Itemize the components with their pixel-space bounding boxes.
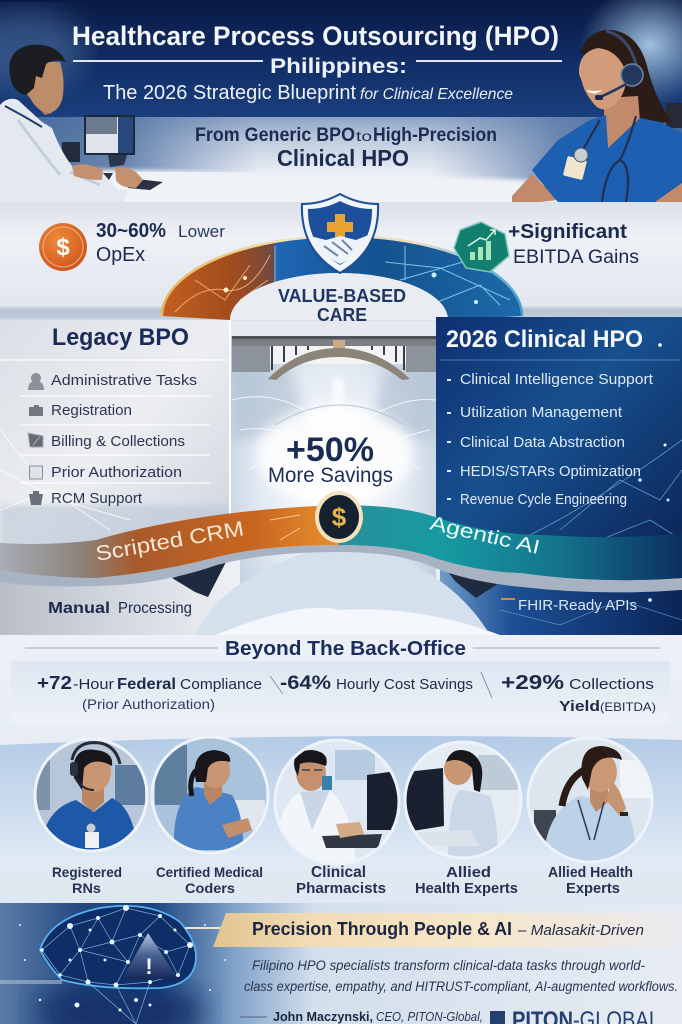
- value-based care label: CARE: [317, 305, 367, 325]
- stat: prior authorization: (Prior Authorization): [82, 696, 215, 712]
- name: Pharmacists: [296, 880, 386, 897]
- savings callout: More Savings: [268, 464, 393, 487]
- bottom section background: [0, 903, 682, 1024]
- stat: prior authorization: Compliance: [180, 676, 262, 693]
- name: RNs: [72, 880, 101, 896]
- doctor figure: [0, 45, 163, 202]
- stat: collections yield: (EBITDA): [600, 700, 656, 714]
- ribbon shadows: [172, 562, 507, 598]
- ribbon: scripted crm: [0, 505, 339, 578]
- portrait: [34, 740, 148, 852]
- icon: billing document: [28, 433, 43, 447]
- attribution: CEO, PITON-Global,: [376, 1009, 483, 1024]
- ribbon: scripted crm: Scripted CRM: [94, 517, 246, 566]
- value-based care label: VALUE-BASED: [278, 286, 406, 306]
- team member: clinical pharmacists: [272, 739, 404, 897]
- title: The 2026 Strategic Blueprint: [103, 82, 356, 104]
- stat: lower opex: OpEx: [96, 244, 145, 266]
- panel: clinical hpo: [436, 317, 682, 560]
- stat: hourly cost savings: [280, 673, 473, 694]
- stat: prior authorization: Federal: [117, 676, 176, 693]
- icon: dollar coin connector: [315, 491, 363, 543]
- team member: allied health experts: [404, 740, 524, 897]
- lower right panel: [440, 540, 682, 635]
- stat: prior authorization: -Hour: [73, 676, 114, 693]
- subheading: to: [356, 128, 372, 144]
- heading: 2026 clinical hpo: 2026 Clinical HPO: [446, 326, 643, 353]
- heading: legacy bpo: Legacy BPO: [52, 324, 189, 351]
- name: Clinical: [311, 864, 366, 881]
- icon: alert triangle: [122, 933, 178, 979]
- label: manual processing: Manual: [48, 600, 110, 617]
- stat: hourly cost savings: Hourly Cost Savings: [336, 676, 473, 693]
- stat: prior authorization: [37, 673, 262, 712]
- team member: certified medical coders: [150, 735, 270, 896]
- item: administrative tasks: Administrative Tasks: [51, 372, 197, 389]
- team member: allied health experts 2: [525, 737, 657, 897]
- savings callout: +50%: [286, 431, 374, 469]
- value-based care label: [278, 286, 406, 325]
- lower background: [0, 635, 682, 905]
- stat: ebitda gains: EBITDA Gains: [513, 247, 639, 268]
- lower left panel: [0, 560, 240, 635]
- icon: person: [28, 373, 44, 390]
- banner: precision through people and ai: Precision Through People & AI: [252, 919, 512, 939]
- panel: legacy bpo: [0, 320, 230, 560]
- stat: lower opex: [39, 220, 225, 271]
- title: [72, 21, 562, 104]
- name: [52, 864, 122, 896]
- name: Experts: [566, 880, 620, 897]
- item: clinical data abstraction: Clinical Data Abstraction: [460, 434, 625, 451]
- name: Allied Health: [548, 864, 633, 881]
- icon: alert triangle: !: [145, 954, 153, 979]
- stat: hourly cost savings: -64%: [280, 673, 331, 694]
- stat: collections yield: +29%: [501, 672, 564, 694]
- portrait: [404, 740, 524, 860]
- ribbon silver edge: [0, 545, 682, 592]
- attribution: John Maczynski,: [273, 1009, 373, 1024]
- icon: dollar coin: [39, 223, 87, 271]
- body text: Filipino HPO specialists transform clinical-data tasks through world-: [252, 957, 645, 973]
- name: Health Experts: [415, 880, 518, 897]
- subheading: Clinical HPO: [277, 145, 409, 171]
- stat: lower opex: Lower: [178, 222, 225, 241]
- snowy bridge base: [196, 551, 500, 635]
- name: Registered: [52, 864, 122, 880]
- item: billing and collections: Billing & Collections: [51, 433, 185, 450]
- heading: beyond the back-office: Beyond The Back-Office: [225, 638, 466, 660]
- icon: shield with handshake: [302, 194, 378, 273]
- bridge: [232, 336, 436, 380]
- name: [548, 864, 633, 897]
- stat: ebitda gains: [454, 221, 639, 272]
- icon: clipboard: [29, 491, 43, 505]
- name: Certified Medical: [156, 864, 263, 880]
- ribbon: agentic ai: Agentic AI: [428, 512, 542, 559]
- name: [415, 864, 518, 897]
- icon: ai brain network: [0, 905, 226, 1024]
- label: manual processing: Processing: [118, 600, 192, 617]
- benefits band: [0, 202, 682, 322]
- panel: compliance stats: [11, 661, 670, 723]
- header panel: [0, 0, 682, 210]
- subheading: High-Precision: [373, 125, 497, 146]
- value-based care arch: [162, 236, 522, 325]
- name: [156, 864, 263, 896]
- name: [296, 864, 386, 897]
- item: revenue cycle engineering: Revenue Cycle Engineering: [460, 491, 627, 508]
- subheading: From Generic BPO: [195, 125, 355, 146]
- item: rcm support: RCM Support: [51, 490, 143, 507]
- ribbon: agentic ai: [339, 505, 682, 580]
- item: clinical intelligence support: Clinical Intelligence Support: [460, 371, 654, 388]
- center column: bridge and savings: [231, 336, 436, 584]
- stat: prior authorization: +72: [37, 673, 72, 693]
- item: hedis stars optimization: HEDIS/STARs Optimization: [460, 463, 641, 480]
- team member: registered rns: [30, 735, 150, 896]
- item: prior authorization: Prior Authorization: [51, 464, 182, 481]
- stat: lower opex: 30~60%: [96, 220, 166, 242]
- banner: precision through people and ai: [185, 913, 682, 947]
- savings callout: [268, 431, 393, 487]
- item: utilization management: Utilization Management: [460, 404, 623, 421]
- team photo band: [0, 736, 682, 865]
- banner: precision through people and ai: – Malasakit-Driven: [517, 922, 644, 939]
- stat: collections yield: Collections: [569, 676, 654, 693]
- body text: [244, 957, 678, 994]
- portrait: [150, 735, 270, 855]
- icon: briefcase: [29, 405, 43, 416]
- icon: growth hexagon: [454, 222, 509, 272]
- icon: dollar coin connector: $: [332, 502, 347, 532]
- portrait: [525, 737, 657, 863]
- portrait: [272, 739, 404, 865]
- icon: authorization form: [30, 466, 42, 479]
- attribution: [240, 1007, 660, 1024]
- stat: collections yield: [501, 672, 656, 715]
- title: Healthcare Process Outsourcing (HPO): [72, 21, 559, 51]
- label: manual processing: [48, 600, 192, 617]
- item: registration: Registration: [51, 402, 132, 419]
- title: Philippines:: [270, 55, 407, 78]
- label: fhir-ready apis: FHIR-Ready APIs: [518, 597, 637, 614]
- stat: collections yield: Yield: [559, 698, 600, 715]
- title: for Clinical Excellence: [360, 86, 513, 103]
- icon: dollar coin: $: [56, 234, 70, 261]
- subheading: [195, 125, 497, 171]
- name: Coders: [185, 880, 235, 896]
- name: Allied: [446, 864, 491, 881]
- nurse figure: [512, 30, 682, 202]
- stat: ebitda gains: +Significant: [508, 221, 627, 243]
